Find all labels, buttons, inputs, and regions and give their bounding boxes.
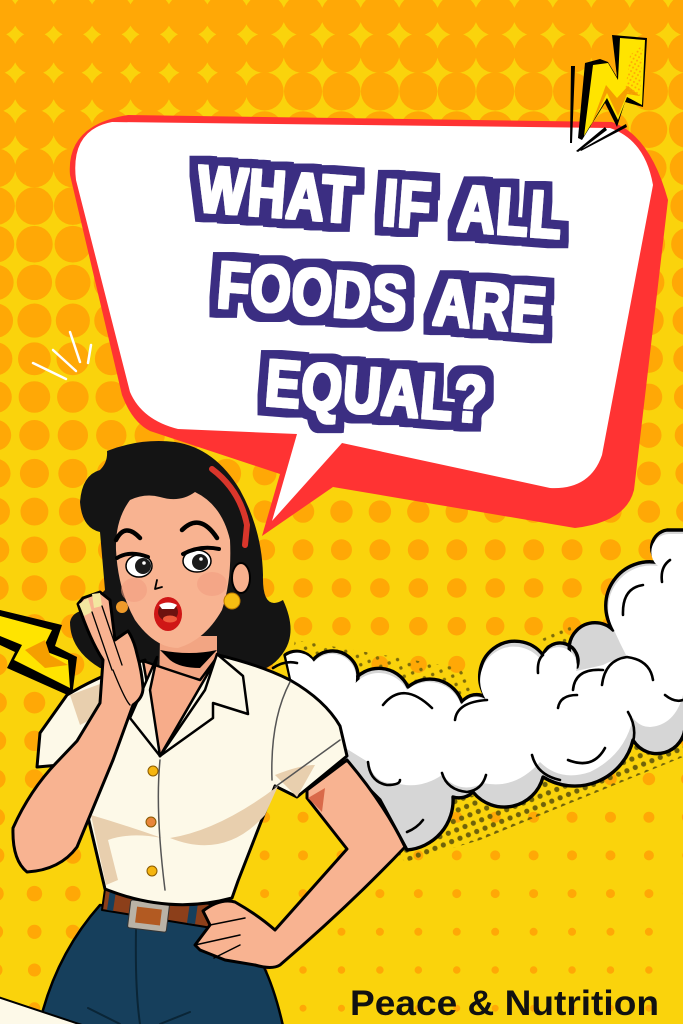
eyebrows xyxy=(116,523,217,540)
face xyxy=(116,492,230,648)
left arm and raised hand xyxy=(13,592,143,872)
title: What if all foods are equal? xyxy=(195,151,565,437)
mouth xyxy=(154,597,182,631)
woman illustration xyxy=(0,441,405,1024)
lightning bolt left xyxy=(0,610,77,697)
fingernails xyxy=(79,593,102,616)
left collar xyxy=(130,657,160,756)
brand footer: Peace & Nutrition xyxy=(350,984,659,1023)
right arm and hand xyxy=(195,760,405,968)
headband xyxy=(212,469,247,545)
cloud grey outline shape xyxy=(285,530,683,850)
earrings xyxy=(116,593,240,613)
neck shadow xyxy=(160,650,217,668)
nose xyxy=(155,580,162,589)
hand finger lines xyxy=(195,918,245,958)
shirt shading xyxy=(70,684,315,885)
title: What if all foods are equal?: WHAT IF ALL xyxy=(195,151,565,252)
shirt neck opening xyxy=(143,656,218,756)
title: What if all foods are equal?: EQUAL? xyxy=(263,345,490,437)
buckle xyxy=(127,900,170,932)
belt xyxy=(102,889,217,928)
lightning bolt top right xyxy=(570,35,647,152)
speech bubble xyxy=(70,115,668,536)
spark lines xyxy=(570,66,627,152)
eyes xyxy=(117,548,219,577)
belt loops xyxy=(107,890,198,924)
bubble red outline and drop shadow xyxy=(70,115,668,536)
smoke cloud xyxy=(273,530,683,850)
arm shadow under sleeve xyxy=(308,788,325,812)
buttons xyxy=(146,766,158,876)
hair back xyxy=(70,441,291,672)
hand creases xyxy=(92,606,130,705)
bolt halftone xyxy=(625,45,643,97)
cream sheet corner xyxy=(0,997,85,1024)
jeans crease xyxy=(88,930,190,1024)
right collar xyxy=(160,654,248,756)
cheek blush xyxy=(121,572,227,602)
ear xyxy=(232,563,250,593)
cloud white highlight shape xyxy=(286,534,683,788)
bubble white body with tail xyxy=(75,122,653,521)
jeans xyxy=(40,905,283,1024)
placket line xyxy=(158,682,340,890)
shirt xyxy=(37,655,347,905)
title: What if all foods are equal?: FOODS ARE xyxy=(215,247,550,347)
small white spark left xyxy=(33,332,91,379)
halftone shadow around cloud xyxy=(293,625,683,862)
cloud inner curls xyxy=(273,560,683,832)
neck xyxy=(158,636,217,756)
